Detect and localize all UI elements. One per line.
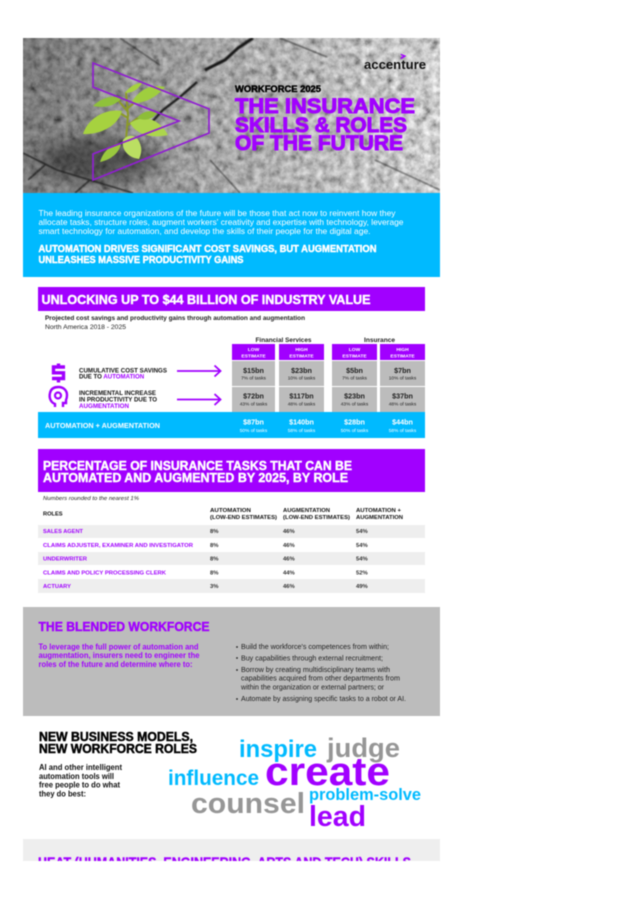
table rows: ACTUARY <box>43 584 71 590</box>
bullet list: Build the workforce's competences from within; <box>241 642 389 651</box>
row: productivity: 43% of tasks <box>240 402 268 408</box>
table rows <box>38 525 425 593</box>
row: automation + augmentation total: 50% of tasks <box>341 428 369 434</box>
icon: dollar sign <box>52 364 65 382</box>
row: cost savings: $5bn <box>346 366 363 375</box>
main title: THE INSURANCE <box>235 94 415 118</box>
estimate column headers <box>232 344 425 360</box>
estimate column headers: ESTIMATE <box>390 354 415 360</box>
intro paragraph: The leading insurance organizations of the future will be those that act now to reinvent how they <box>38 208 396 218</box>
body text <box>39 763 122 798</box>
subtitle: Projected cost savings and productivity gains through automation and augmentation <box>45 315 305 322</box>
label: cumulative cost savings <box>79 368 167 380</box>
table rows: 54% <box>356 556 369 562</box>
row: cost savings: $15bn <box>243 366 264 375</box>
estimate column headers: HIGH <box>295 347 308 353</box>
subtitle <box>45 315 305 331</box>
estimate column headers: LOW <box>349 347 361 353</box>
word cloud: counsel <box>191 788 305 820</box>
bullet list: Buy capabilities through external recruitment; <box>241 654 383 662</box>
word cloud: problem-solve <box>309 785 421 804</box>
estimate column headers: ESTIMATE <box>241 354 266 360</box>
table header: (LOW-END ESTIMATES) <box>210 515 277 521</box>
table rows: UNDERWRITER <box>43 556 88 562</box>
table header: (LOW-END ESTIMATES) <box>283 515 350 521</box>
intro paragraph <box>38 208 404 236</box>
bullet list: Automate by assigning specific tasks to a robot or AI. <box>241 694 406 703</box>
row: automation + augmentation total: $87bn <box>243 418 264 426</box>
arrow <box>177 366 220 376</box>
panel: blended workforce <box>23 607 440 716</box>
estimate column headers: HIGH <box>396 347 409 353</box>
label: incremental increase <box>79 390 157 410</box>
table rows: CLAIMS AND POLICY PROCESSING CLERK <box>43 570 167 576</box>
accenture chevron outline <box>93 63 209 180</box>
row: cost savings: $23bn <box>291 366 312 375</box>
table header <box>43 508 403 521</box>
label: incremental increase: IN PRODUCTIVITY DUE TO <box>79 396 157 404</box>
table rows: 46% <box>283 529 296 535</box>
lead-in text: augmentation, insurers need to engineer the <box>38 651 200 660</box>
row: cost savings: 10% of tasks <box>288 376 316 382</box>
row: automation + augmentation total: 58% of tasks <box>389 428 417 434</box>
table header: AUGMENTATION <box>356 515 403 521</box>
table rows: 46% <box>283 543 296 549</box>
table header: AUTOMATION <box>210 508 251 514</box>
table rows: 54% <box>356 529 369 535</box>
table header: AUGMENTATION <box>283 508 330 514</box>
arrow <box>177 394 220 405</box>
table rows: 46% <box>283 584 296 590</box>
label: cumulative cost savings: DUE TO AUTOMATION <box>79 374 144 380</box>
table rows: 46% <box>283 556 296 562</box>
row: productivity: 48% of tasks <box>389 402 417 408</box>
row: cost savings: 7% of tasks <box>342 376 367 382</box>
panel: HEAT skills (cut off) <box>23 839 440 862</box>
word cloud: lead <box>309 801 366 833</box>
panel: industry value <box>38 287 425 438</box>
row: productivity: $72bn <box>243 392 264 400</box>
heading: percentage of tasks <box>38 449 425 492</box>
body text: AI and other intelligent <box>39 763 122 772</box>
table rows: 8% <box>210 570 219 576</box>
label: incremental increase: INCREMENTAL INCREASE <box>79 390 156 397</box>
estimate column headers: ESTIMATE <box>342 354 367 360</box>
table rows: 3% <box>210 584 219 590</box>
intro headline <box>38 244 376 266</box>
row: productivity: 43% of tasks <box>341 402 369 408</box>
subtitle: North America 2018 - 2025 <box>45 324 126 331</box>
table header: AUTOMATION + <box>356 508 402 514</box>
icon: head with gear <box>50 387 67 407</box>
table header: ROLES <box>43 512 63 518</box>
intro paragraph: smart technology for automation, and develop the skills of their people for the digital age. <box>38 226 370 236</box>
body text: automation tools will <box>39 772 114 781</box>
row: productivity: $37bn <box>392 392 413 400</box>
word cloud <box>168 733 421 833</box>
section: new business models <box>39 730 421 833</box>
panel: HEAT skills (cut off): HEAT (HUMANITIES, ENGINEERING, ARTS AND TECH) SKILLS <box>38 855 411 870</box>
bullet list: within the organization or external partners; or <box>240 682 384 692</box>
word cloud: judge <box>326 733 400 763</box>
heading: NEW WORKFORCE ROLES <box>39 742 197 756</box>
label: incremental increase: AUGMENTATION <box>79 403 129 410</box>
lead-in text: To leverage the full power of automation and <box>38 642 199 652</box>
panel: tasks by role <box>38 449 425 593</box>
label: cumulative cost savings: CUMULATIVE COST SAVINGS <box>79 368 167 374</box>
table rows: 8% <box>210 556 219 562</box>
row: automation + augmentation total: $140bn <box>289 418 314 426</box>
heading: unlocking value <box>38 287 425 311</box>
intro panel <box>23 193 440 277</box>
table rows: 49% <box>356 584 369 590</box>
bullet list: capabilities acquired from other departments from <box>241 674 400 682</box>
word cloud: inspire <box>239 736 317 763</box>
row: automation + augmentation total <box>38 412 425 438</box>
body text: free people to do what <box>39 780 120 790</box>
table rows: 44% <box>283 570 296 576</box>
heading: unlocking value: UNLOCKING UP TO $44 BILLION OF INDUSTRY VALUE <box>42 292 371 307</box>
row: cost savings <box>52 361 425 386</box>
row: automation + augmentation total: 50% of tasks <box>240 428 268 434</box>
column group labels <box>256 337 395 344</box>
main title <box>235 94 415 155</box>
lead-in text <box>38 642 200 669</box>
heading: percentage of tasks: PERCENTAGE OF INSURANCE TASKS THAT CAN BE <box>43 458 352 473</box>
column group labels: Insurance <box>364 337 395 344</box>
background: cracked rock <box>23 38 440 193</box>
bullet list: Borrow by creating multidisciplinary teams with <box>241 665 390 674</box>
table rows: 54% <box>356 543 369 549</box>
rounding note: Numbers rounded to the nearest 1% <box>43 496 139 502</box>
intro paragraph: allocate tasks, structure roles, augment workers' creativity and expertise with technology, leverage <box>38 217 404 227</box>
kicker: workforce 2025: WORKFORCE 2025 <box>235 84 322 95</box>
word cloud: influence <box>168 767 259 790</box>
main title: SKILLS & ROLES <box>235 113 407 137</box>
table rows: 52% <box>356 570 369 576</box>
heading: percentage of tasks: AUTOMATED AND AUGMENTED BY 2025, BY ROLE <box>43 470 348 485</box>
table rows: 8% <box>210 543 219 549</box>
column group labels: Financial Services <box>256 337 312 344</box>
row: productivity: 48% of tasks <box>288 402 316 408</box>
estimate column headers: LOW <box>248 347 260 353</box>
row: automation + augmentation total: $28bn <box>344 418 365 426</box>
bullet list <box>236 642 406 703</box>
plant <box>83 83 168 162</box>
row: productivity: $117bn <box>289 392 314 400</box>
heading <box>39 730 197 756</box>
hero banner <box>23 38 440 193</box>
row: automation + augmentation total: $44bn <box>392 418 413 426</box>
table rows: 8% <box>210 529 219 535</box>
estimate column headers: ESTIMATE <box>289 354 314 360</box>
table rows: CLAIMS ADJUSTER, EXAMINER AND INVESTIGATOR <box>43 543 194 549</box>
row: cost savings: 7% of tasks <box>241 376 266 382</box>
row: productivity: $23bn <box>344 392 365 400</box>
row: cost savings: $7bn <box>394 366 411 375</box>
intro headline: UNLEASHES MASSIVE PRODUCTIVITY GAINS <box>38 255 244 266</box>
word cloud: create <box>265 750 390 794</box>
row: automation + augmentation total: 58% of tasks <box>288 428 316 434</box>
table rows: SALES AGENT <box>43 529 83 535</box>
row: automation + augmentation total: AUTOMATION + AUGMENTATION <box>45 423 160 430</box>
row: productivity <box>50 387 425 412</box>
heading: NEW BUSINESS MODELS, <box>39 730 193 744</box>
main title: OF THE FUTURE <box>235 131 403 155</box>
intro headline: AUTOMATION DRIVES SIGNIFICANT COST SAVINGS, BUT AUGMENTATION <box>38 244 376 255</box>
accenture logo: accenture <box>364 58 426 72</box>
lead-in text: roles of the future and determine where to: <box>38 660 192 669</box>
heading: THE BLENDED WORKFORCE <box>38 619 210 634</box>
body text: they do best: <box>39 790 86 798</box>
row: cost savings: 10% of tasks <box>389 376 417 382</box>
